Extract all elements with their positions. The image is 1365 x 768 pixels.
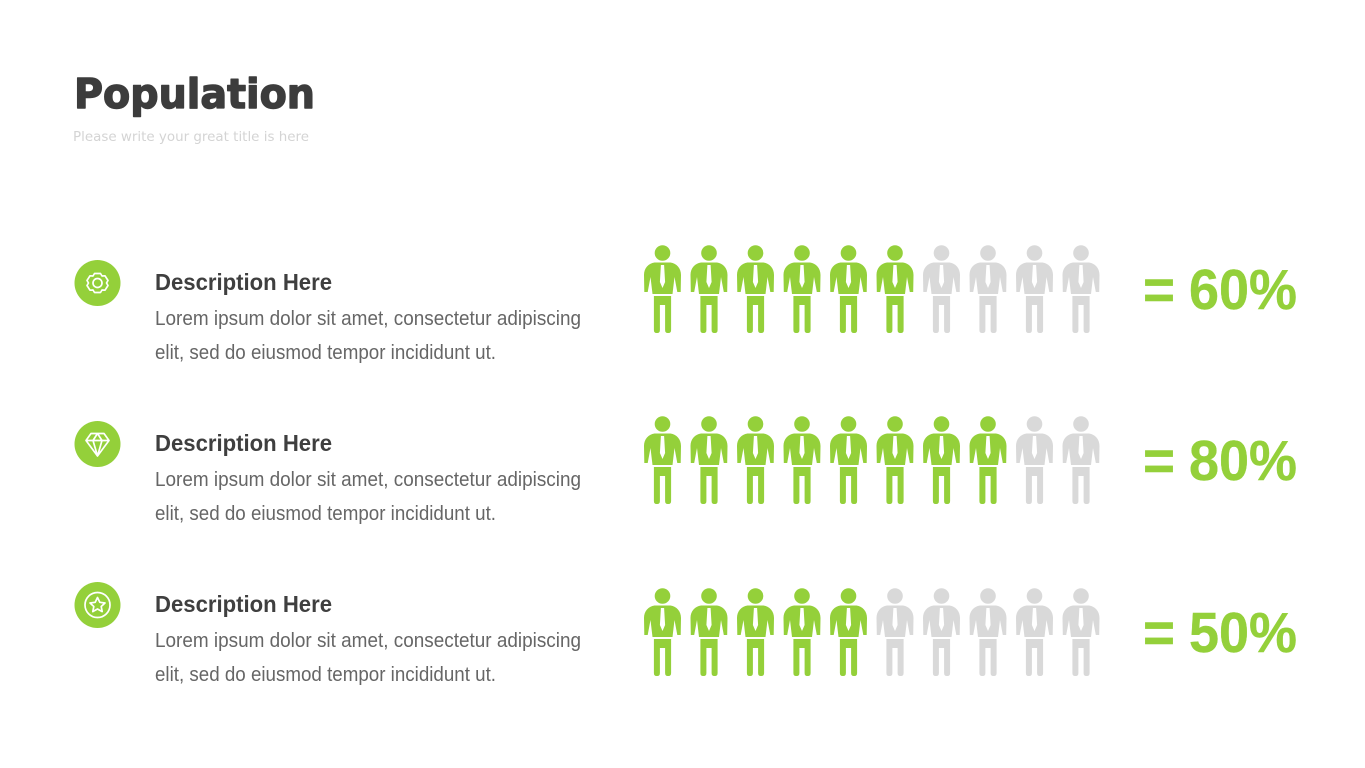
- icon: diamond: [74, 421, 120, 467]
- value: 80 percent: [1143, 429, 1297, 493]
- row 2: [74, 416, 1297, 525]
- pictogram: 80 percent: [644, 416, 1100, 504]
- value: 50 percent: 50%: [1189, 601, 1297, 665]
- icon: gear: [74, 260, 120, 306]
- description text 3: [155, 591, 581, 686]
- value: 60 percent: =: [1143, 258, 1175, 322]
- icon: star badge: [74, 582, 120, 628]
- description text 3: elit, sed do eiusmod tempor incididunt ut.: [155, 663, 496, 686]
- description text 2: Description Here: [155, 430, 332, 456]
- value: 80 percent: =: [1143, 429, 1175, 493]
- subtitle: Please write your great title is here: [73, 129, 309, 145]
- description text 1: Description Here: [155, 269, 332, 295]
- description text 3: Lorem ipsum dolor sit amet, consectetur adipiscing: [155, 629, 581, 652]
- description text 1: [155, 269, 581, 364]
- value: 60 percent: 60%: [1189, 258, 1297, 322]
- pictogram: 60 percent: [644, 245, 1100, 333]
- row 1: [74, 245, 1297, 364]
- description text 2: [155, 430, 581, 525]
- value: 80 percent: 80%: [1189, 429, 1297, 493]
- row 3: [74, 582, 1297, 686]
- description text 2: Lorem ipsum dolor sit amet, consectetur adipiscing: [155, 468, 581, 491]
- pictogram: 50 percent: [644, 588, 1100, 676]
- description text 1: elit, sed do eiusmod tempor incididunt ut.: [155, 341, 496, 364]
- value: 50 percent: =: [1143, 601, 1175, 665]
- description text 3: Description Here: [155, 591, 332, 617]
- title: Population: [74, 70, 315, 118]
- description text 1: Lorem ipsum dolor sit amet, consectetur adipiscing: [155, 307, 581, 330]
- value: 60 percent: [1143, 258, 1297, 322]
- value: 50 percent: [1143, 601, 1297, 665]
- description text 2: elit, sed do eiusmod tempor incididunt ut.: [155, 502, 496, 525]
